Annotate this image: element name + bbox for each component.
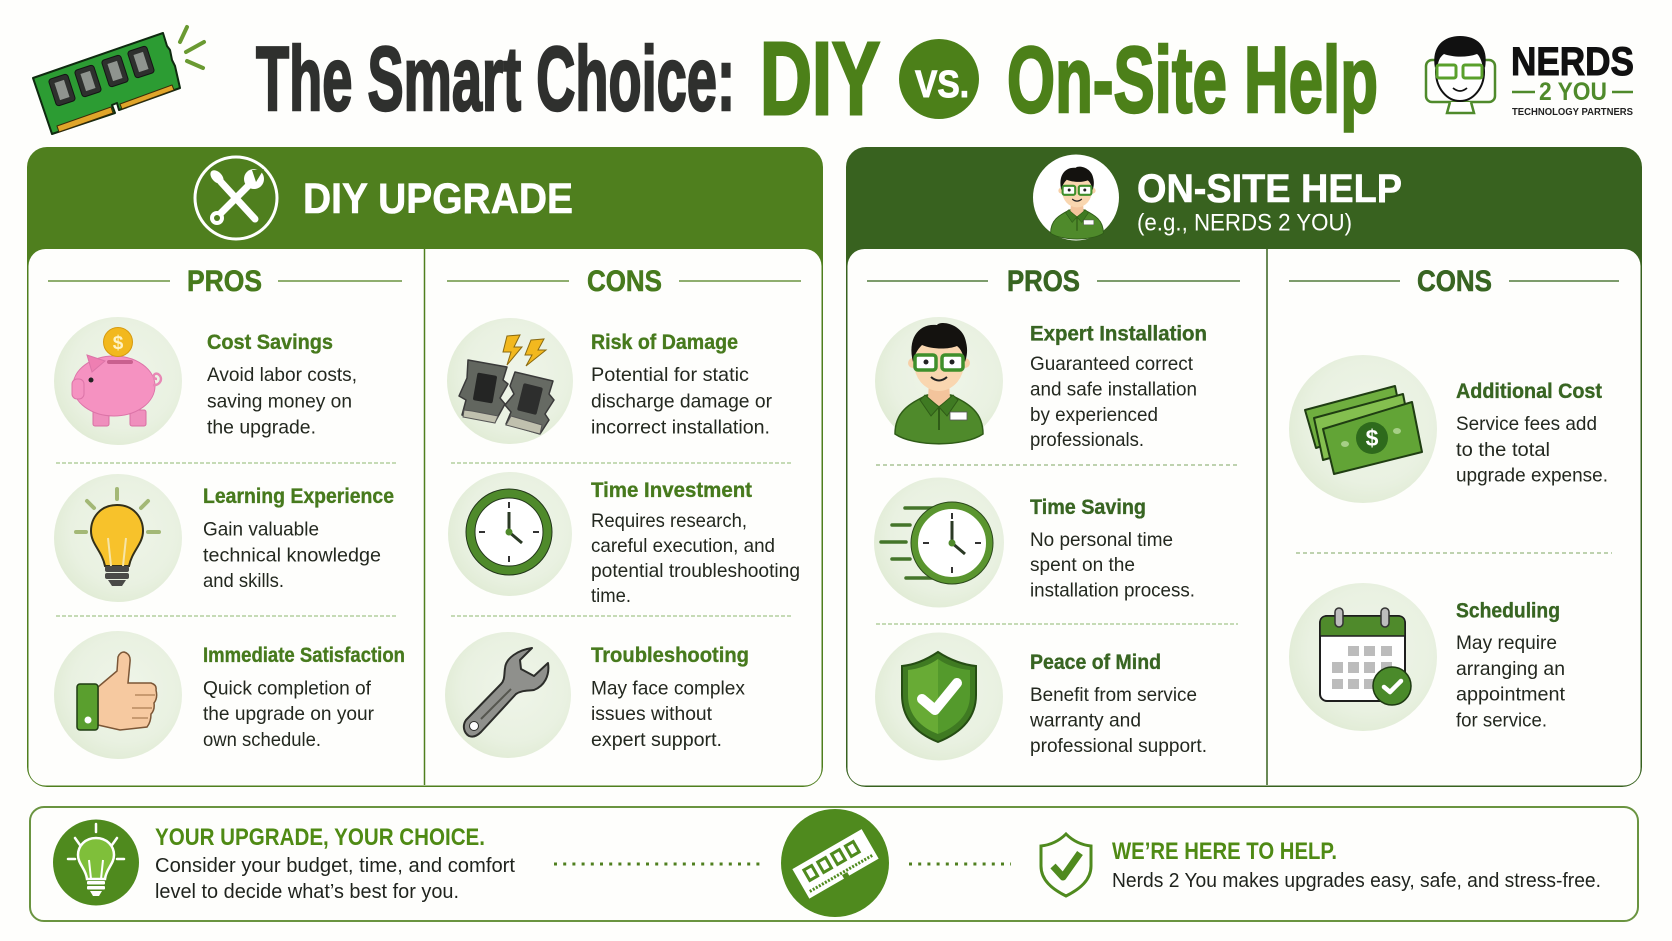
icon: light bulb [54, 474, 182, 602]
text: peace of mind: professional support. [1030, 735, 1207, 757]
text: here to help [1112, 838, 1601, 892]
icon: calendar with check [1289, 583, 1437, 731]
heading: pros: PROS [1007, 265, 1080, 298]
text: peace of mind: warranty and [1029, 710, 1141, 732]
icon: fast clock [874, 478, 1004, 608]
column: on-site cons [1289, 265, 1619, 732]
logo: Nerds 2 You: 2 YOU [1539, 78, 1607, 106]
icon: shield outline [1041, 834, 1091, 896]
title: DIY [760, 21, 880, 136]
text: additional cost: Service fees add [1456, 413, 1597, 435]
icon: RAM module with sparks [33, 27, 204, 134]
title: VS. [915, 64, 969, 106]
text: time saving: No personal time [1030, 529, 1173, 551]
text: risk of damage: Potential for static [591, 364, 749, 386]
text: scheduling: for service. [1456, 710, 1547, 732]
text: immediate satisfaction: Immediate Satisfaction [203, 643, 405, 667]
text: time saving: Time Saving [1030, 495, 1146, 519]
text: cost savings: saving money on [207, 390, 352, 412]
text: time saving: installation process. [1030, 580, 1195, 602]
icon: wrench [445, 632, 571, 758]
text: risk of damage: discharge damage or [591, 390, 772, 412]
icon: light bulb badge [53, 820, 139, 906]
text: your upgrade [155, 824, 515, 903]
icon: stack of cash [1289, 355, 1437, 503]
text: time investment: potential troubleshooting [591, 560, 800, 582]
item: time investment [448, 472, 800, 607]
text: scheduling: May require [1456, 632, 1557, 654]
text: learning experience: Gain valuable [203, 518, 319, 540]
heading: on-site help [1137, 167, 1402, 236]
text: troubleshooting: expert support. [591, 729, 722, 751]
logo: Nerds 2 You: TECHNOLOGY PARTNERS [1512, 106, 1633, 118]
text: learning experience: Learning Experience [203, 484, 394, 508]
icon: thumbs up [54, 631, 182, 759]
text: expert installation: and safe installation [1030, 378, 1197, 400]
item: peace of mind [875, 632, 1207, 760]
column: DIY pros [48, 265, 405, 759]
text: troubleshooting: Troubleshooting [591, 643, 749, 667]
heading: pros: PROS [187, 265, 262, 298]
text: learning experience: and skills. [203, 570, 284, 592]
heading: cons: CONS [1417, 265, 1492, 298]
column: on-site pros [867, 265, 1240, 760]
icon: RAM badge [781, 809, 889, 917]
text: additional cost [1456, 379, 1608, 486]
text: time saving [1030, 495, 1195, 602]
text: immediate satisfaction: Quick completion of [203, 678, 372, 700]
text: cost savings [207, 330, 357, 438]
item: time saving [874, 478, 1195, 608]
icon: technician portrait [1033, 154, 1119, 240]
text: cost savings: Avoid labor costs, [207, 364, 357, 386]
text: immediate satisfaction: own schedule. [203, 729, 321, 751]
text: here to help: Nerds 2 You makes upgrades easy, safe, and stress-free. [1112, 869, 1601, 892]
text: immediate satisfaction [203, 643, 405, 751]
text: time investment: time. [591, 585, 631, 607]
text: expert installation: professionals. [1030, 429, 1144, 451]
icon: clock [448, 472, 572, 596]
panel: DIY upgrade [27, 147, 823, 787]
heading: on-site help: (e.g., NERDS 2 YOU) [1137, 210, 1352, 236]
text: time investment: Time Investment [591, 478, 752, 502]
heading: on-site help: ON-SITE HELP [1137, 167, 1402, 211]
text: troubleshooting: issues without [591, 703, 713, 725]
text: peace of mind: Peace of Mind [1030, 650, 1161, 674]
text: scheduling: arranging an [1456, 658, 1565, 680]
panel: on-site help [846, 147, 1642, 787]
item: immediate satisfaction [54, 631, 405, 759]
icon: damaged memory chips [447, 318, 573, 444]
text: cost savings: the upgrade. [207, 416, 316, 438]
text: your upgrade: Consider your budget, time, and comfort [155, 854, 515, 877]
text: scheduling: appointment [1456, 684, 1566, 706]
title [256, 21, 1378, 136]
text: troubleshooting [591, 643, 749, 751]
logo: Nerds 2 You: NERDS [1511, 40, 1634, 84]
text: expert installation: Guaranteed correct [1030, 353, 1194, 375]
icon: piggy bank: $ [113, 333, 124, 354]
text: troubleshooting: May face complex [591, 678, 745, 700]
column: DIY cons [445, 265, 801, 758]
text: cost savings: Cost Savings [207, 330, 333, 354]
item: learning experience [54, 474, 394, 602]
text: additional cost: upgrade expense. [1456, 464, 1608, 486]
text: scheduling: Scheduling [1456, 598, 1560, 622]
footer banner [30, 807, 1638, 921]
text: time investment: careful execution, and [591, 535, 775, 557]
item: risk of damage [447, 318, 772, 444]
text: your upgrade: YOUR UPGRADE, YOUR CHOICE. [155, 824, 485, 851]
text: risk of damage [591, 330, 772, 438]
text: risk of damage: Risk of Damage [591, 330, 738, 354]
item: expert installation [875, 317, 1207, 451]
text: additional cost: to the total [1456, 439, 1550, 461]
item: cost savings [54, 317, 357, 445]
text: here to help: WE’RE HERE TO HELP. [1112, 838, 1337, 865]
text: peace of mind [1029, 650, 1207, 757]
text: time investment [591, 478, 800, 607]
item: troubleshooting [445, 632, 749, 758]
text: expert installation [1030, 322, 1207, 451]
item: additional cost [1289, 355, 1608, 503]
text: additional cost: Additional Cost [1456, 379, 1602, 403]
text: scheduling [1456, 598, 1566, 732]
title: On-Site Help [1007, 27, 1378, 132]
icon: piggy bank [54, 317, 182, 445]
heading: cons: CONS [587, 265, 662, 298]
text: expert installation: Expert Installation [1030, 322, 1207, 346]
text: immediate satisfaction: the upgrade on your [203, 703, 374, 725]
icon: crossed tools [195, 157, 277, 239]
text: your upgrade: level to decide what’s best for you. [155, 880, 459, 903]
text: time saving: spent on the [1030, 554, 1135, 576]
text: expert installation: by experienced [1030, 404, 1158, 426]
icon: stack of cash: $ [1366, 425, 1379, 451]
text: time investment: Requires research, [591, 510, 747, 532]
text: learning experience [203, 484, 394, 592]
text: risk of damage: incorrect installation. [591, 416, 770, 438]
text: learning experience: technical knowledge [203, 544, 381, 566]
icon: technician [875, 317, 1003, 445]
logo: Nerds 2 You [1426, 36, 1634, 118]
item: scheduling [1289, 583, 1566, 732]
title: The Smart Choice: [256, 29, 735, 130]
header [33, 21, 1634, 136]
text: peace of mind: Benefit from service [1030, 684, 1197, 706]
heading: DIY upgrade: DIY UPGRADE [303, 175, 573, 223]
icon: shield with check [875, 632, 1003, 760]
